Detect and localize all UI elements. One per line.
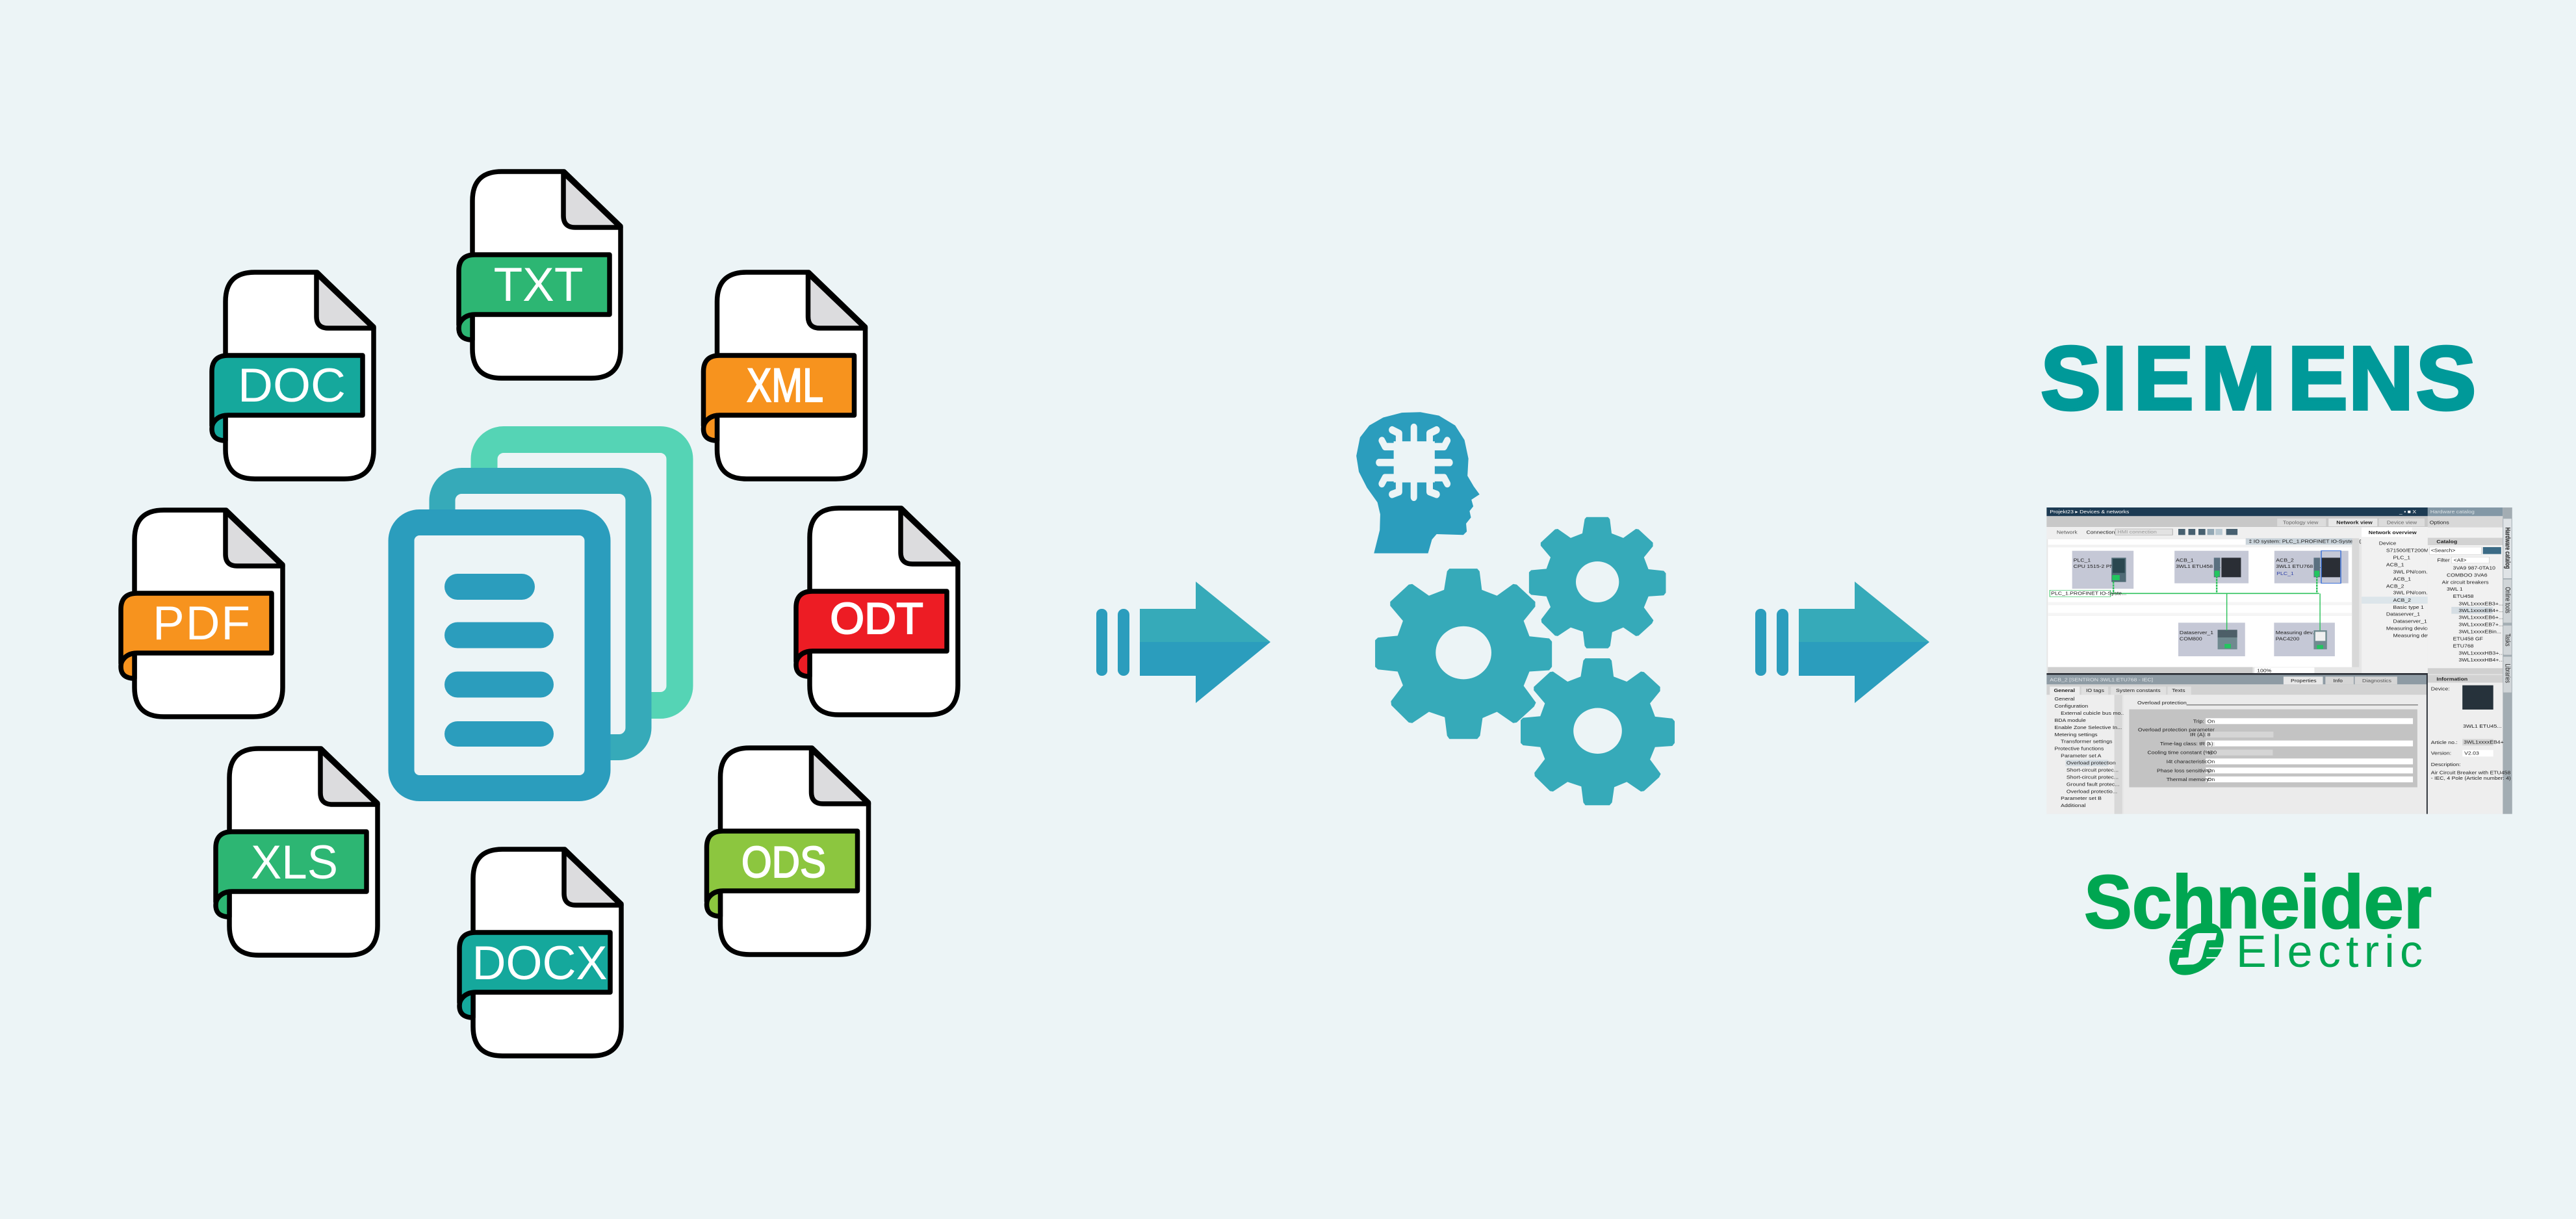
panel: network overview: Dataserver_1 bbox=[2393, 619, 2427, 624]
device: ACB_1: ACB_1 bbox=[2176, 558, 2194, 563]
panel: hardware catalog: 3VA9 987-0TA10 bbox=[2453, 565, 2495, 571]
panel: hardware catalog: 3WL 1 bbox=[2447, 586, 2463, 592]
icon: ODT file: ODT bbox=[830, 594, 923, 643]
icon: XML file bbox=[703, 272, 866, 479]
panel: network overview bbox=[2362, 527, 2437, 673]
device: PLC_1 bbox=[2072, 551, 2133, 589]
title bars bbox=[2046, 507, 2503, 516]
network toolbar: Network bbox=[2057, 530, 2078, 535]
icon: PDF file bbox=[121, 510, 283, 717]
canvas scrollbars bbox=[2048, 538, 2359, 673]
panel: hardware catalog: <Search> bbox=[2431, 548, 2456, 553]
panel: hardware catalog: Air circuit breakers bbox=[2442, 580, 2489, 585]
panel: network overview: 3WL PN/com... bbox=[2393, 590, 2431, 596]
inspector tabs: IO tags bbox=[2086, 687, 2104, 693]
inspector header: Diagnostics bbox=[2362, 678, 2391, 684]
inspector navigation: Metering settings bbox=[2055, 732, 2098, 738]
icon: gears bbox=[1375, 517, 1675, 805]
inspector tabs: System constants bbox=[2116, 687, 2161, 693]
view tabs bbox=[2046, 516, 2503, 528]
panel: network overview: ACB_2 bbox=[2393, 597, 2412, 603]
canvas scrollbars: 100% bbox=[2257, 668, 2271, 673]
device: ACB_2: ACB_2 bbox=[2276, 558, 2294, 563]
overload protection form: Overload protection parameter bbox=[2138, 727, 2215, 732]
wordmark: Schneider: Schneider bbox=[2084, 860, 2432, 944]
overload protection form bbox=[2124, 695, 2428, 814]
icon: XLS file bbox=[216, 749, 378, 955]
device: ACB_2: PLC_1 bbox=[2276, 571, 2294, 576]
symbol: Schneider S bbox=[2169, 923, 2224, 975]
overload protection form: On bbox=[2208, 719, 2215, 724]
device: Dataserver_1: COM800 bbox=[2180, 636, 2202, 641]
side tab strip: Tasks bbox=[2503, 634, 2512, 647]
panel: network overview: Device bbox=[2379, 541, 2397, 546]
overload protection form: Overload protection bbox=[2137, 700, 2187, 706]
inspector navigation: BDA module bbox=[2055, 717, 2086, 723]
panel: hardware catalog: Filter bbox=[2437, 558, 2450, 563]
icon: TXT file: TXT bbox=[494, 259, 583, 311]
title bars: Projekt23 ▸ Devices & networks bbox=[2050, 509, 2129, 515]
device: ACB_2 bbox=[2274, 551, 2349, 584]
panel: hardware catalog: ETU768 bbox=[2453, 643, 2474, 649]
device: ACB_2: 3WL1 ETU768 -... bbox=[2276, 563, 2321, 569]
arrow: documents to processing bbox=[1096, 582, 1270, 703]
icon: DOCX file bbox=[459, 849, 621, 1056]
network toolbar: Connections bbox=[2086, 530, 2118, 535]
overload protection form: Cooling time constant (%): bbox=[2147, 750, 2213, 755]
device: Dataserver_1: Dataserver_1 bbox=[2180, 630, 2214, 635]
device: Measuring device bbox=[2274, 622, 2335, 656]
arrow: processing to output bbox=[1755, 582, 1929, 703]
device: PLC_1: CPU 1515-2 PN bbox=[2074, 563, 2114, 569]
inspector navigation: Configuration bbox=[2055, 703, 2089, 709]
side tab strip: Libraries bbox=[2503, 664, 2512, 683]
information panel: - IEC, 4 Pole (Article number: 4) bbox=[2431, 775, 2511, 781]
inspector navigation: Overload protection bbox=[2067, 760, 2116, 765]
icon: DOC file: DOC bbox=[238, 359, 346, 412]
panel: hardware catalog: 3WL1xxxxEB7+... bbox=[2458, 622, 2503, 628]
view tabs: Device view bbox=[2387, 520, 2417, 526]
inspector navigation: Ground fault protec... bbox=[2067, 782, 2120, 787]
information panel: Description: bbox=[2431, 762, 2461, 767]
panel: hardware catalog: ETU458 GF bbox=[2453, 636, 2483, 642]
device: Dataserver_1 bbox=[2178, 622, 2245, 656]
PROFINET network lines bbox=[2050, 576, 2320, 630]
inspector navigation: Overload protectio... bbox=[2067, 789, 2117, 794]
screenshot: TIA Portal devices and networks bbox=[2046, 507, 2512, 814]
information panel: 3WL1 ETU45... bbox=[2463, 723, 2502, 729]
inspector header: ACB_2 [SENTRON 3WL1 ETU768 - IEC] bbox=[2050, 677, 2153, 683]
icon: PDF file: PDF bbox=[153, 597, 250, 650]
icon: ODT file bbox=[796, 508, 958, 715]
information panel bbox=[2427, 675, 2511, 814]
inspector tabs bbox=[2046, 684, 2428, 695]
inspector navigation: Protective functions bbox=[2055, 746, 2104, 751]
panel: network overview: ACB_2 bbox=[2386, 584, 2404, 589]
information panel: Version: bbox=[2431, 751, 2451, 756]
network toolbar: HMI connection bbox=[2117, 529, 2157, 535]
panel: network overview: Measuring dev... bbox=[2393, 633, 2434, 638]
view tabs: Topology view bbox=[2283, 520, 2319, 526]
inspector navigation: Parameter set B bbox=[2061, 795, 2102, 801]
information panel: V2.03 bbox=[2464, 751, 2479, 756]
overload protection form: Trip: bbox=[2193, 719, 2204, 724]
information panel: Air Circuit Breaker with ETU458 bbox=[2431, 770, 2511, 775]
icon: ODS file: ODS bbox=[741, 838, 826, 887]
icon: XLS file: XLS bbox=[251, 836, 338, 889]
device: ACB_1 bbox=[2174, 551, 2248, 584]
panel: network overview: Measuring device_1 bbox=[2386, 626, 2437, 632]
panel: network overview: Basic type 1 bbox=[2393, 604, 2424, 610]
panel: network overview: 3WL PN/com... bbox=[2393, 569, 2431, 574]
panel: hardware catalog bbox=[2428, 528, 2504, 674]
inspector tabs: General bbox=[2054, 687, 2075, 693]
inspector header: Properties bbox=[2291, 678, 2317, 684]
side tab strip bbox=[2503, 507, 2512, 814]
icon: TXT file bbox=[459, 172, 621, 378]
inspector header bbox=[2046, 673, 2428, 684]
logo: Schneider Electric bbox=[2084, 860, 2432, 977]
panel: network overview: S71500/ET200MP... bbox=[2386, 548, 2436, 553]
panel: network overview: ACB_1 bbox=[2393, 576, 2412, 582]
information panel: 3WL1xxxxEB4+ bbox=[2464, 739, 2504, 745]
panel: hardware catalog: COMBOO 3VA6 bbox=[2447, 572, 2488, 578]
overload protection form: On bbox=[2208, 768, 2215, 773]
inspector navigation: General bbox=[2055, 696, 2075, 702]
overload protection form: 1 bbox=[2208, 741, 2211, 747]
overload protection form: Thermal memory: bbox=[2167, 776, 2211, 782]
panel: hardware catalog: 3WL1xxxxHB3+... bbox=[2458, 650, 2504, 656]
device: Measuring device: PAC4200 bbox=[2276, 636, 2300, 641]
device: ACB_1: 3WL1 ETU458 -... bbox=[2176, 563, 2221, 569]
inspector navigation: Short-circuit protec... bbox=[2067, 775, 2119, 780]
panel: network overview: ACB_1 bbox=[2386, 562, 2404, 567]
inspector navigation: Short-circuit protec... bbox=[2067, 767, 2119, 773]
overload protection form: 8 bbox=[2208, 732, 2211, 738]
panel: hardware catalog: 3WL1xxxxHB4+... bbox=[2458, 657, 2504, 663]
network canvas bbox=[2048, 538, 2373, 667]
inspector navigation bbox=[2046, 695, 2126, 814]
inspector navigation: Transformer settings bbox=[2061, 739, 2113, 744]
inspector navigation: External cubicle bus mo... bbox=[2061, 710, 2126, 716]
panel: network overview: PLC_1 bbox=[2393, 555, 2411, 560]
panel: network overview: Dataserver_1 bbox=[2386, 611, 2421, 617]
overload protection form: Time-lag class: tR (s): bbox=[2160, 741, 2215, 747]
overload protection form: On bbox=[2208, 776, 2215, 782]
panel: hardware catalog: 3WL1xxxxEB4+... bbox=[2458, 608, 2503, 613]
icon: XML file: XML bbox=[747, 359, 823, 412]
device: Measuring device: Measuring dev... bbox=[2276, 630, 2317, 635]
icon: ODS file bbox=[707, 748, 868, 955]
inspector header: Info bbox=[2333, 678, 2343, 684]
panel: hardware catalog: <All> bbox=[2454, 558, 2467, 563]
information panel: Device: bbox=[2431, 686, 2450, 691]
overload protection form: 100 bbox=[2208, 750, 2217, 755]
panel: hardware catalog: Catalog bbox=[2436, 539, 2457, 545]
side tab strip: Hardware catalog bbox=[2503, 528, 2512, 569]
title bars: _ ▪ ■ X bbox=[2399, 509, 2417, 515]
title bars: Hardware catalog bbox=[2430, 509, 2475, 515]
information panel: Article no.: bbox=[2431, 739, 2458, 745]
icon: DOCX file: DOCX bbox=[472, 937, 607, 990]
view tabs: Network view bbox=[2336, 520, 2373, 526]
inspector navigation: Additional bbox=[2061, 802, 2086, 808]
overload protection form: I4t characteristic: bbox=[2167, 759, 2209, 764]
panel: hardware catalog: 3WL1xxxxEBin... bbox=[2458, 629, 2501, 635]
overload protection form: Phase loss sensitivity: bbox=[2157, 768, 2212, 773]
panel: hardware catalog: ETU458 bbox=[2453, 593, 2474, 599]
inspector navigation: Enable Zone Selective In... bbox=[2055, 725, 2122, 730]
network label: PLC_1.PROFINET IO-Syste... bbox=[2051, 591, 2126, 597]
panel: network overview: Network overview bbox=[2369, 530, 2417, 535]
overload protection form: On bbox=[2208, 759, 2215, 764]
panel: hardware catalog: 3WL1xxxxEB3+... bbox=[2458, 601, 2503, 606]
icon: AI head with chip bbox=[1356, 412, 1480, 553]
logo: Siemens: SIEMENS bbox=[2041, 329, 2476, 429]
device: PLC_1: PLC_1 bbox=[2074, 558, 2091, 563]
information panel: Information bbox=[2436, 676, 2467, 682]
network toolbar bbox=[2046, 527, 2362, 539]
side tab strip: Online tools bbox=[2503, 587, 2512, 613]
panel: hardware catalog: 3WL1xxxxEB6+... bbox=[2458, 615, 2503, 621]
overload protection form: IR (A): bbox=[2190, 732, 2206, 738]
wordmark: Electric: Electric bbox=[2236, 926, 2423, 977]
inspector tabs: Texts bbox=[2172, 687, 2185, 693]
view tabs: Options bbox=[2430, 520, 2449, 526]
icon: DOC file bbox=[212, 272, 374, 479]
icon: document stack bbox=[402, 439, 680, 788]
network canvas: ‡ IO system: PLC_1.PROFINET IO-System (101) bbox=[2249, 539, 2373, 544]
inspector navigation: Parameter set A bbox=[2061, 753, 2102, 758]
